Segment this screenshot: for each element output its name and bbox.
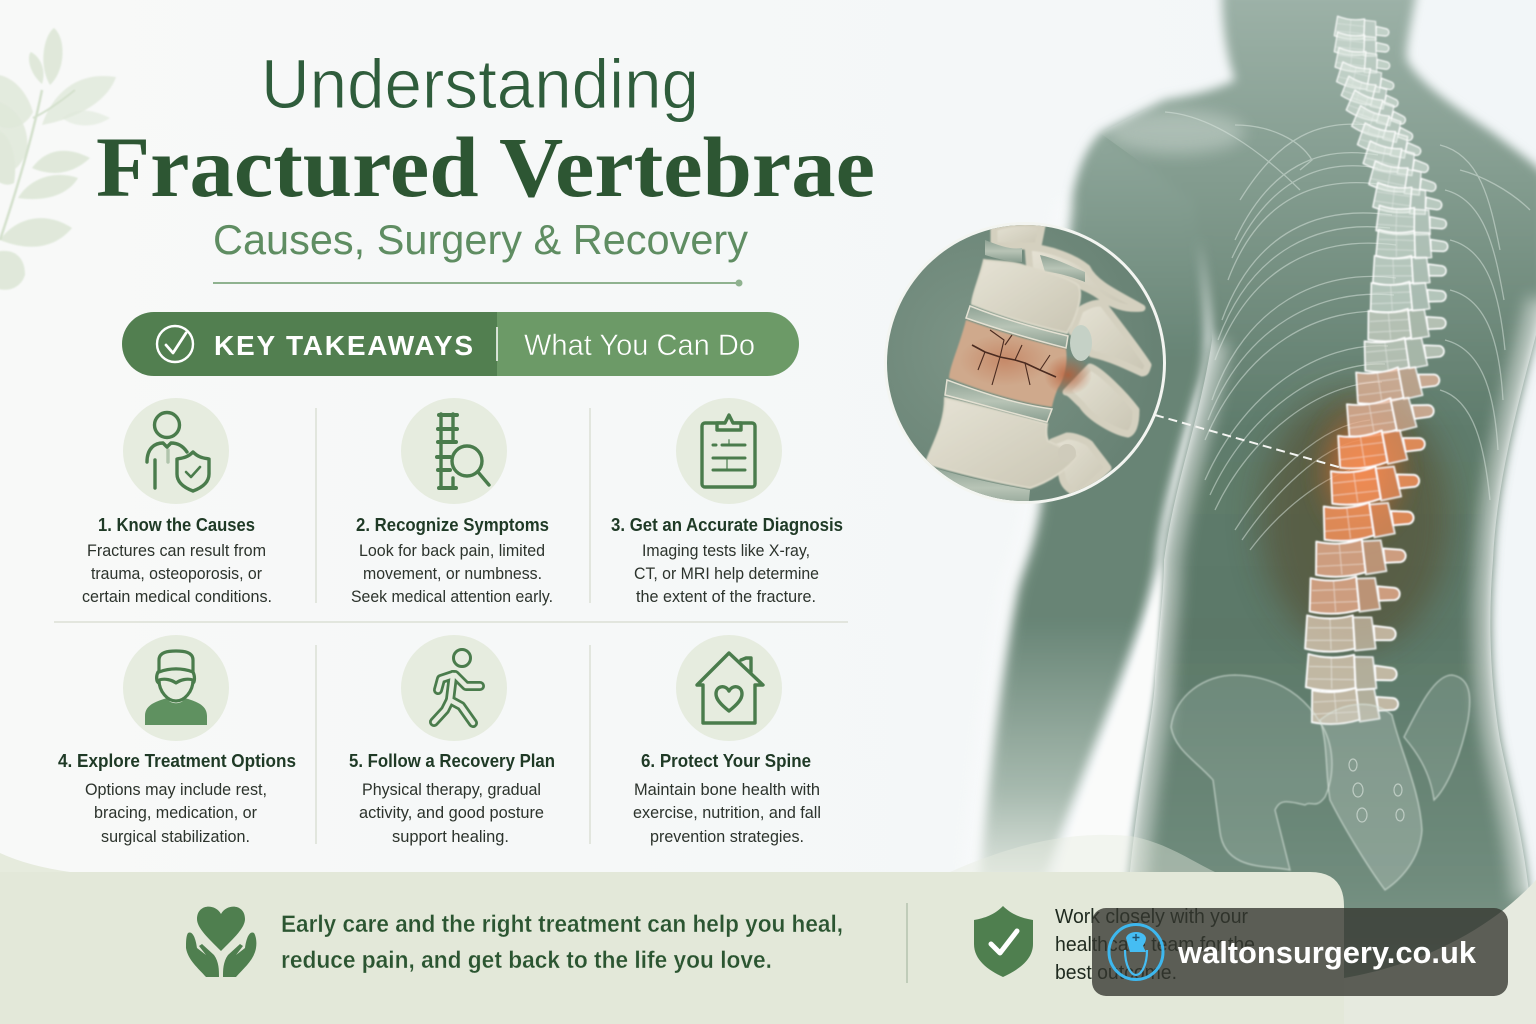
callout: work with your team [1055, 906, 1255, 984]
panel: know the causes [82, 398, 272, 606]
icon: surgeon [123, 635, 229, 741]
title line 1: Understanding [261, 45, 699, 123]
callout: early care message: Early care and the right treatment can help you heal, [281, 911, 843, 938]
gap between arm and torso [1056, 350, 1208, 880]
decorative leaf sprig [0, 28, 116, 290]
icon: spine and magnifier [401, 398, 507, 504]
panel: recognize symptoms [351, 398, 553, 606]
description: Physical therapy, gradual [362, 781, 541, 799]
callout: work with your team: Work closely with your [1055, 906, 1248, 928]
warm lumbar tone [1260, 390, 1450, 650]
description [85, 781, 267, 846]
fracture cracks [972, 330, 1056, 385]
callout: early care message [281, 911, 843, 974]
panel: protect your spine [633, 635, 821, 846]
description: activity, and good posture [359, 804, 544, 822]
anatomical back figure [971, 0, 1536, 1024]
icon: hands holding heart [186, 907, 256, 977]
description: Look for back pain, limited [359, 542, 545, 560]
banner heading: KEY TAKEAWAYS [214, 330, 473, 361]
title line 2: Fractured Vertebrae [96, 119, 875, 215]
description: the extent of the fracture. [636, 588, 816, 606]
fractured vertebra [949, 320, 1067, 407]
callout: early care message: reduce pain, and get back to the life you love. [281, 947, 772, 974]
icon: clipboard [676, 398, 782, 504]
pelvis and sacrum [1171, 675, 1470, 890]
description [634, 542, 819, 606]
heading: 5. Follow a Recovery Plan [349, 750, 555, 771]
callout: work with your team: best outcome. [1055, 962, 1177, 984]
heading: 2. Recognize Symptoms [356, 514, 549, 535]
description [633, 781, 821, 846]
website watermark [1092, 908, 1508, 996]
description [351, 542, 553, 606]
intact vertebra below [926, 398, 1078, 488]
heading: 1. Know the Causes [98, 514, 255, 535]
description [359, 781, 544, 846]
heading: 6. Protect Your Spine [641, 750, 811, 771]
description: Seek medical attention early. [351, 588, 553, 606]
icon: shield with check [974, 906, 1033, 977]
spine glow [1300, 385, 1424, 555]
callout: work with your team: healthcare team for the [1055, 934, 1255, 956]
title divider [213, 280, 742, 286]
sacral foramina [1349, 759, 1404, 822]
logo [1109, 924, 1163, 980]
intact vertebra above [972, 260, 1080, 333]
description: Maintain bone health with [634, 781, 820, 799]
heading: 4. Explore Treatment Options [58, 750, 296, 771]
icon: walking person [401, 635, 507, 741]
dashed connector [1155, 415, 1342, 468]
icon: check circle [157, 326, 193, 362]
vertebra detail circle [880, 215, 1170, 510]
edge glow [1130, 290, 1536, 904]
lower right light curve [1344, 880, 1536, 1024]
description: Fractures can result from [87, 542, 266, 560]
description: trauma, osteoporosis, or [91, 565, 262, 583]
banner subheading: What You Can Do [524, 329, 755, 362]
description: certain medical conditions. [82, 588, 272, 606]
vertebrae column [1305, 16, 1448, 725]
bottom callout band [0, 872, 1344, 1024]
subtitle: Causes, Surgery & Recovery [213, 216, 748, 263]
description: Options may include rest, [85, 781, 267, 799]
body silhouette [978, 0, 1536, 1024]
panel: treatment options [58, 635, 296, 846]
description: support healing. [392, 828, 509, 846]
key takeaways banner [122, 312, 799, 376]
panel: recovery plan [349, 635, 555, 846]
description: movement, or numbness. [363, 565, 542, 583]
heading: 3. Get an Accurate Diagnosis [611, 514, 843, 535]
icon: person with shield [123, 398, 229, 504]
icon: house with heart [676, 635, 782, 741]
wave behind bottom band [950, 835, 1215, 872]
description: Imaging tests like X-ray, [642, 542, 810, 560]
description: bracing, medication, or [94, 804, 257, 822]
description [82, 542, 272, 606]
arm outer glow [971, 200, 1065, 880]
title [96, 45, 875, 263]
panel: accurate diagnosis [611, 398, 843, 606]
ribs [1165, 112, 1530, 550]
shoulder highlight [1105, 110, 1245, 154]
description: exercise, nutrition, and fall [633, 804, 821, 822]
watermark text: waltonsurgery.co.uk [1177, 935, 1477, 970]
description: surgical stabilization. [101, 828, 250, 846]
description: CT, or MRI help determine [634, 565, 819, 583]
description: prevention strategies. [650, 828, 804, 846]
